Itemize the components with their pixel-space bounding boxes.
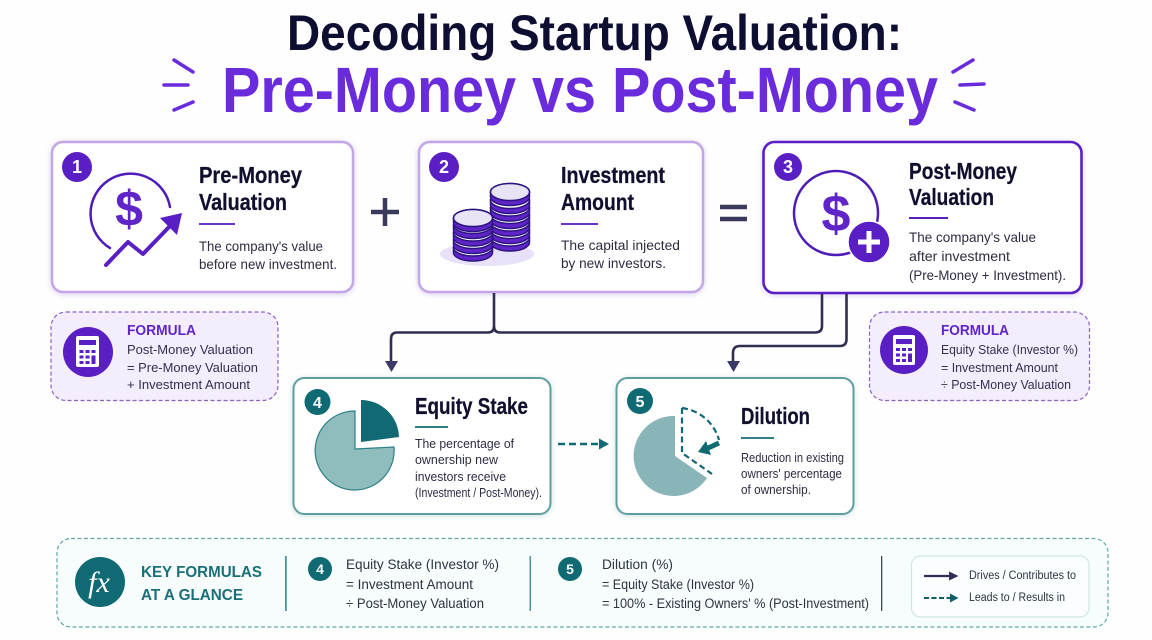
- description: before new investment.: [199, 256, 337, 272]
- heading: Dilution: [741, 403, 810, 429]
- description: (Pre-Money + Investment).: [909, 267, 1066, 283]
- formula text: ÷ Post-Money Valuation: [941, 377, 1071, 392]
- panel: dilution: [616, 378, 854, 514]
- dilution formula: [558, 557, 869, 611]
- badge 5: [627, 388, 653, 414]
- badge 3: [774, 153, 802, 181]
- icon: coin stacks: [440, 184, 534, 266]
- heading: [141, 564, 262, 604]
- dilution formula: = 100% - Existing Owners' % (Post-Investment): [602, 596, 869, 611]
- heading: Valuation: [909, 184, 994, 210]
- arrow: post-money to dilution: [727, 294, 846, 372]
- formula text: [941, 323, 1078, 392]
- heading: Valuation: [199, 189, 287, 215]
- equity stake formula: 4: [316, 561, 324, 577]
- badge 2: 2: [439, 157, 449, 177]
- formula text: + Investment Amount: [127, 377, 250, 392]
- description: The capital injected: [561, 237, 680, 253]
- description: investors receive: [415, 469, 506, 484]
- badge 3: 3: [783, 157, 793, 177]
- icon: dollar with rising arrow: $: [115, 181, 143, 237]
- heading: Pre-Money: [199, 162, 302, 188]
- arrow: investment and post-money to equity stake: [385, 293, 822, 372]
- description: [415, 436, 542, 500]
- description: after investment: [909, 248, 1010, 264]
- callout: formula equity stake: [870, 312, 1090, 400]
- description: (Investment / Post-Money).: [415, 485, 542, 500]
- heading: KEY FORMULAS: [141, 564, 262, 581]
- formula text: = Investment Amount: [941, 360, 1058, 375]
- title: [164, 5, 984, 126]
- badge 1: [62, 152, 92, 182]
- heading: [199, 162, 302, 215]
- formula text: FORMULA: [941, 323, 1009, 339]
- description: Reduction in existing: [741, 451, 844, 465]
- icon: pie with slice: [315, 400, 399, 490]
- icon: fx: fx: [88, 566, 111, 599]
- icon: fx: [75, 557, 125, 607]
- description: The company's value: [909, 229, 1036, 245]
- panel: post-money valuation: [764, 142, 1082, 293]
- icon: calculator: [63, 327, 113, 377]
- badge 5: 5: [636, 394, 645, 411]
- description: [741, 451, 844, 497]
- panel: key formulas at a glance: [57, 538, 1108, 627]
- dilution formula: 5: [566, 561, 574, 577]
- callout: formula post-money: [51, 312, 278, 400]
- icon: left sparks: [164, 60, 193, 110]
- icon: dollar with rising arrow: [91, 174, 182, 265]
- icon: diluted pie: [634, 408, 719, 496]
- formula text: FORMULA: [127, 323, 196, 339]
- panel: equity stake: [294, 378, 550, 514]
- operator: plus: [371, 198, 399, 226]
- heading: Amount: [561, 189, 634, 215]
- title line 1: Decoding Startup Valuation:: [287, 5, 902, 61]
- icon: dollar with plus: [794, 171, 890, 263]
- badge 4: 4: [313, 395, 322, 412]
- legend: Leads to / Results in: [969, 592, 1065, 604]
- description: [561, 237, 680, 271]
- heading: AT A GLANCE: [141, 587, 243, 604]
- equity stake formula: Equity Stake (Investor %): [346, 557, 499, 572]
- icon: dollar with plus: $: [822, 185, 851, 243]
- badge 1: 1: [72, 157, 82, 177]
- panel: investment amount: [419, 142, 703, 292]
- heading: [561, 162, 665, 215]
- heading: Investment: [561, 162, 665, 188]
- dilution formula: Dilution (%): [602, 557, 673, 572]
- description: ownership new: [415, 452, 499, 467]
- icon: right sparks: [953, 60, 984, 110]
- heading: Equity Stake: [415, 393, 528, 419]
- badge 2: [429, 152, 459, 182]
- arrow: equity stake leads to dilution: [558, 438, 609, 450]
- description: [909, 229, 1066, 283]
- description: [199, 238, 337, 272]
- formula text: = Pre-Money Valuation: [127, 360, 258, 375]
- operator: equals: [720, 207, 747, 219]
- formula text: Post-Money Valuation: [127, 342, 253, 357]
- badge 4: [304, 389, 330, 415]
- heading: [909, 158, 1017, 210]
- heading: Post-Money: [909, 158, 1017, 184]
- description: The percentage of: [415, 436, 514, 451]
- equity stake formula: [308, 557, 499, 611]
- description: of ownership.: [741, 483, 811, 497]
- legend: Drives / Contributes to: [969, 570, 1076, 582]
- legend: [912, 556, 1089, 617]
- formula text: [127, 323, 258, 392]
- formula text: Equity Stake (Investor %): [941, 342, 1078, 357]
- title line 2: Pre-Money vs Post-Money: [222, 54, 938, 126]
- icon: calculator: [880, 326, 928, 374]
- description: owners' percentage: [741, 467, 842, 481]
- description: The company's value: [199, 238, 323, 254]
- panel: pre-money valuation: [52, 142, 353, 292]
- equity stake formula: ÷ Post-Money Valuation: [346, 596, 484, 611]
- dilution formula: = Equity Stake (Investor %): [602, 577, 754, 592]
- description: by new investors.: [561, 255, 666, 271]
- equity stake formula: = Investment Amount: [346, 577, 473, 592]
